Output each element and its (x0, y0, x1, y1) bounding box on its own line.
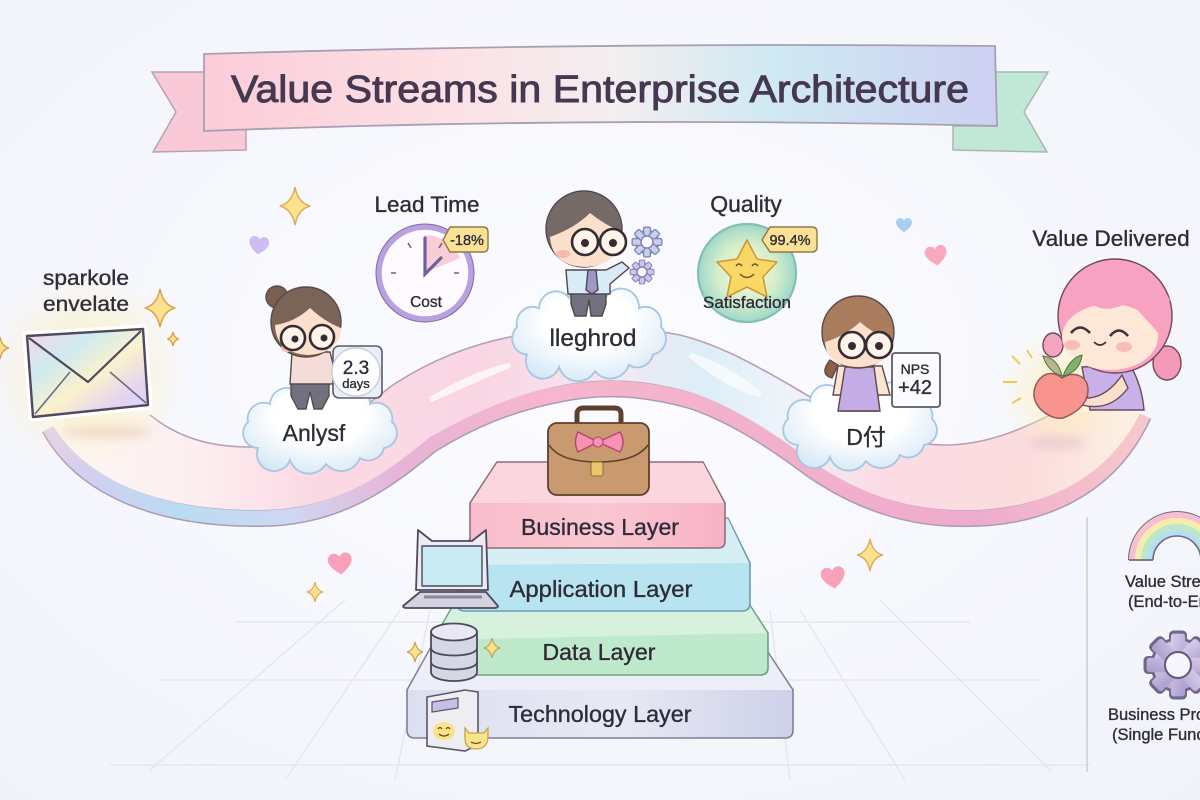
value delivered (1000, 226, 1190, 454)
dev on cloud (783, 296, 940, 471)
data layer: Data Layer (542, 639, 656, 665)
icon: database (431, 624, 477, 681)
icon: gears (630, 227, 662, 284)
cost label: Cost (410, 294, 443, 311)
cloud (512, 282, 666, 381)
badge: NPS +42: NPS (901, 361, 929, 377)
icon: apple (1034, 355, 1088, 418)
icon: sparkles (0, 289, 179, 359)
layer stack (407, 462, 793, 738)
title: Value Streams in Enterprise Architecture (231, 69, 969, 111)
tag: 99.4% (769, 233, 811, 249)
analyst on cloud (243, 286, 397, 474)
icon: sun rays (1003, 350, 1032, 403)
business layer: Business Layer (521, 514, 679, 540)
circle (698, 224, 796, 322)
KPI: quality (698, 191, 817, 322)
label: lleghrod (550, 325, 636, 352)
label: Value Delivered (1032, 226, 1190, 251)
icon: sparkles near database (407, 638, 500, 662)
application layer: Application Layer (510, 576, 693, 602)
data layer (433, 590, 768, 675)
icon: star (717, 240, 777, 297)
icon: briefcase (548, 408, 649, 495)
label: Anlysf (283, 420, 346, 446)
banner body (204, 45, 997, 131)
character (266, 286, 341, 409)
title banner (152, 45, 1048, 152)
clock (376, 224, 474, 322)
girl (1043, 259, 1181, 410)
application layer (457, 518, 750, 611)
label: D付 (846, 424, 886, 450)
badge: NPS +42: +42 (898, 377, 932, 399)
value stream ribbon (50, 328, 1143, 518)
envelope (0, 267, 186, 470)
icon: gear (1145, 632, 1200, 698)
badge: 2.3 days: days (342, 376, 370, 391)
icon: server with faces (427, 690, 488, 751)
KPI: lead time clock (374, 192, 488, 322)
business layer (470, 462, 725, 548)
badge: 2.3 days: 2.3 (343, 358, 369, 379)
icon: envelope (27, 329, 148, 417)
decorations: sparkles and hearts (248, 187, 949, 602)
envelope label: envelate (43, 293, 129, 316)
legend divider (1086, 517, 1088, 772)
tag: -18% (450, 233, 484, 249)
icon: rainbow (1129, 512, 1200, 560)
satisfaction label: Satisfaction (703, 293, 791, 312)
character (822, 296, 894, 411)
left ribbon tail (152, 72, 246, 152)
icon: cat laptop (403, 530, 498, 608)
floor grid (110, 600, 1090, 780)
legend: business process (1108, 632, 1200, 744)
badge: 2.3 days (332, 346, 382, 398)
technology layer: Technology Layer (508, 701, 692, 727)
badge: NPS +42 (892, 353, 940, 407)
cloud (243, 379, 397, 474)
right ribbon tail (953, 72, 1048, 152)
character (546, 191, 629, 316)
cloud (783, 376, 937, 471)
label: Quality (710, 191, 782, 217)
envelope label (43, 267, 129, 316)
label: Lead Time (374, 192, 480, 217)
legend: value stream (1125, 512, 1200, 611)
technology layer (407, 622, 793, 738)
center person on cloud (512, 191, 666, 381)
envelope label: sparkole (43, 267, 129, 290)
